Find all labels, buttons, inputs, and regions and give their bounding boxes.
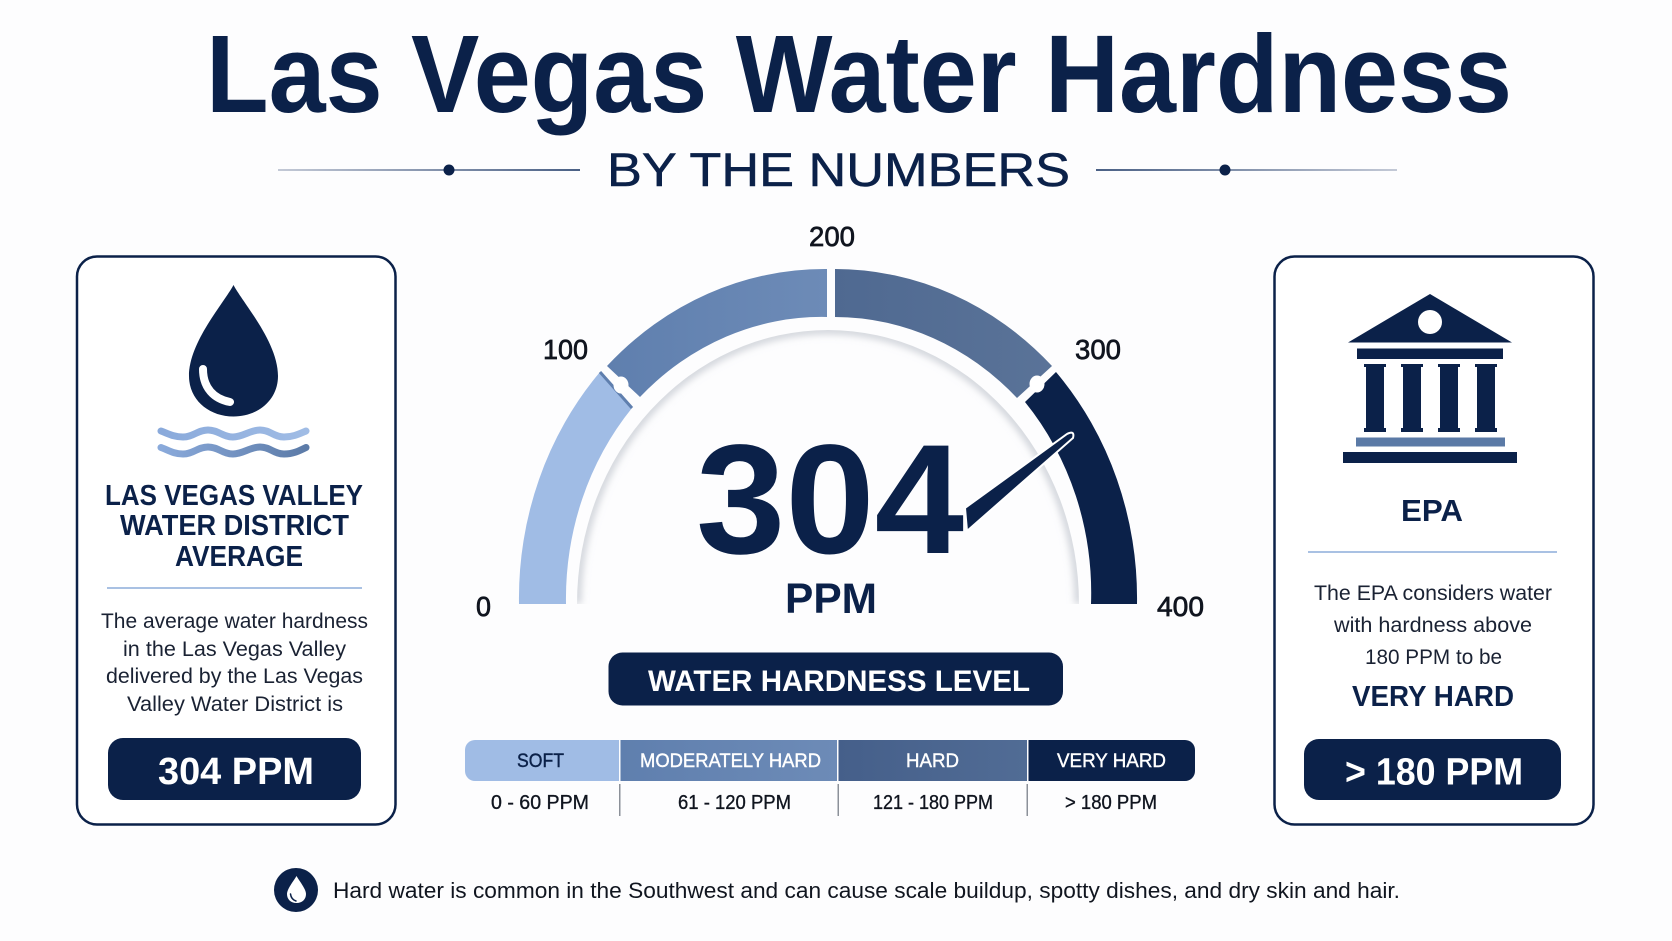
- hardness scale bar: MODERATELY HARD: [640, 751, 821, 772]
- body text: [101, 610, 368, 716]
- body text: Valley Water District is: [127, 693, 343, 716]
- gauge tick labels: 0: [476, 591, 491, 622]
- gauge segment: moderately hard: [607, 269, 827, 397]
- gauge marker left: [614, 376, 628, 394]
- gauge unit: PPM: [785, 575, 877, 623]
- gauge tick labels: 300: [1075, 334, 1121, 365]
- hardness ranges: 121 - 180 PPM: [873, 792, 993, 814]
- hardness scale bar: VERY HARD: [1057, 751, 1166, 772]
- emphasis: very hard: VERY HARD: [1352, 681, 1514, 713]
- panel: Las Vegas Valley Water District average: [77, 256, 396, 824]
- title: Las Vegas Water Hardness: [206, 13, 1512, 136]
- value pill: 304 PPM: [108, 738, 361, 800]
- body text: in the Las Vegas Valley: [123, 638, 347, 661]
- banner: water hardness level: WATER HARDNESS LEVEL: [648, 665, 1030, 698]
- subtitle: by the numbers: [278, 143, 1397, 196]
- heading: EPA: [1401, 493, 1463, 528]
- subtitle: by the numbers: BY THE NUMBERS: [607, 143, 1070, 196]
- icon: water drop with waves: [161, 285, 306, 454]
- hardness scale bar: HARD: [906, 751, 959, 772]
- gauge tick labels: [476, 221, 1204, 622]
- footer note: [274, 868, 1400, 912]
- body text: The EPA considers water: [1314, 582, 1552, 605]
- value pill: greater than 180 PPM: > 180 PPM: [1345, 752, 1523, 794]
- body text: with hardness above: [1333, 614, 1532, 637]
- heading: [105, 480, 363, 573]
- hardness scale bar: [465, 740, 1195, 781]
- body text: 180 PPM to be: [1365, 646, 1502, 669]
- gauge tick labels: 200: [809, 221, 855, 252]
- gauge inner disc: [577, 330, 1079, 604]
- hardness scale bar: SOFT: [517, 751, 564, 772]
- panel: EPA: [1274, 256, 1594, 824]
- body text: delivered by the Las Vegas: [106, 665, 363, 688]
- banner: water hardness level: [608, 652, 1063, 706]
- gauge segment: very hard: [1025, 372, 1137, 604]
- gauge marker right: [1030, 376, 1044, 392]
- hardness ranges: > 180 PPM: [1065, 792, 1157, 814]
- heading: WATER DISTRICT: [120, 510, 349, 542]
- hardness ranges: 0 - 60 PPM: [491, 792, 589, 814]
- gauge tick labels: 400: [1157, 591, 1204, 622]
- gauge tick labels: 100: [543, 334, 588, 365]
- body text: [1314, 582, 1552, 669]
- heading: AVERAGE: [175, 541, 303, 573]
- gauge segment: hard: [835, 269, 1052, 398]
- value pill: greater than 180 PPM: [1304, 739, 1561, 800]
- footer note: Hard water is common in the Southwest and can cause scale buildup, spotty dishes, and dry skin and hair.: [333, 878, 1400, 903]
- icon: government building: [1343, 294, 1517, 463]
- gauge segment: soft: [519, 372, 632, 604]
- gauge needle: [965, 433, 1073, 531]
- gauge value: 304: [696, 413, 964, 587]
- hardness ranges: [491, 784, 1157, 816]
- gauge chart: [476, 221, 1204, 623]
- heading: LAS VEGAS VALLEY: [105, 480, 363, 512]
- gauge boundary sliver: [600, 372, 632, 408]
- body text: The average water hardness: [101, 610, 368, 633]
- hardness ranges: 61 - 120 PPM: [678, 792, 791, 814]
- icon: small water drop: [274, 868, 318, 912]
- value pill: 304 PPM: 304 PPM: [158, 751, 314, 793]
